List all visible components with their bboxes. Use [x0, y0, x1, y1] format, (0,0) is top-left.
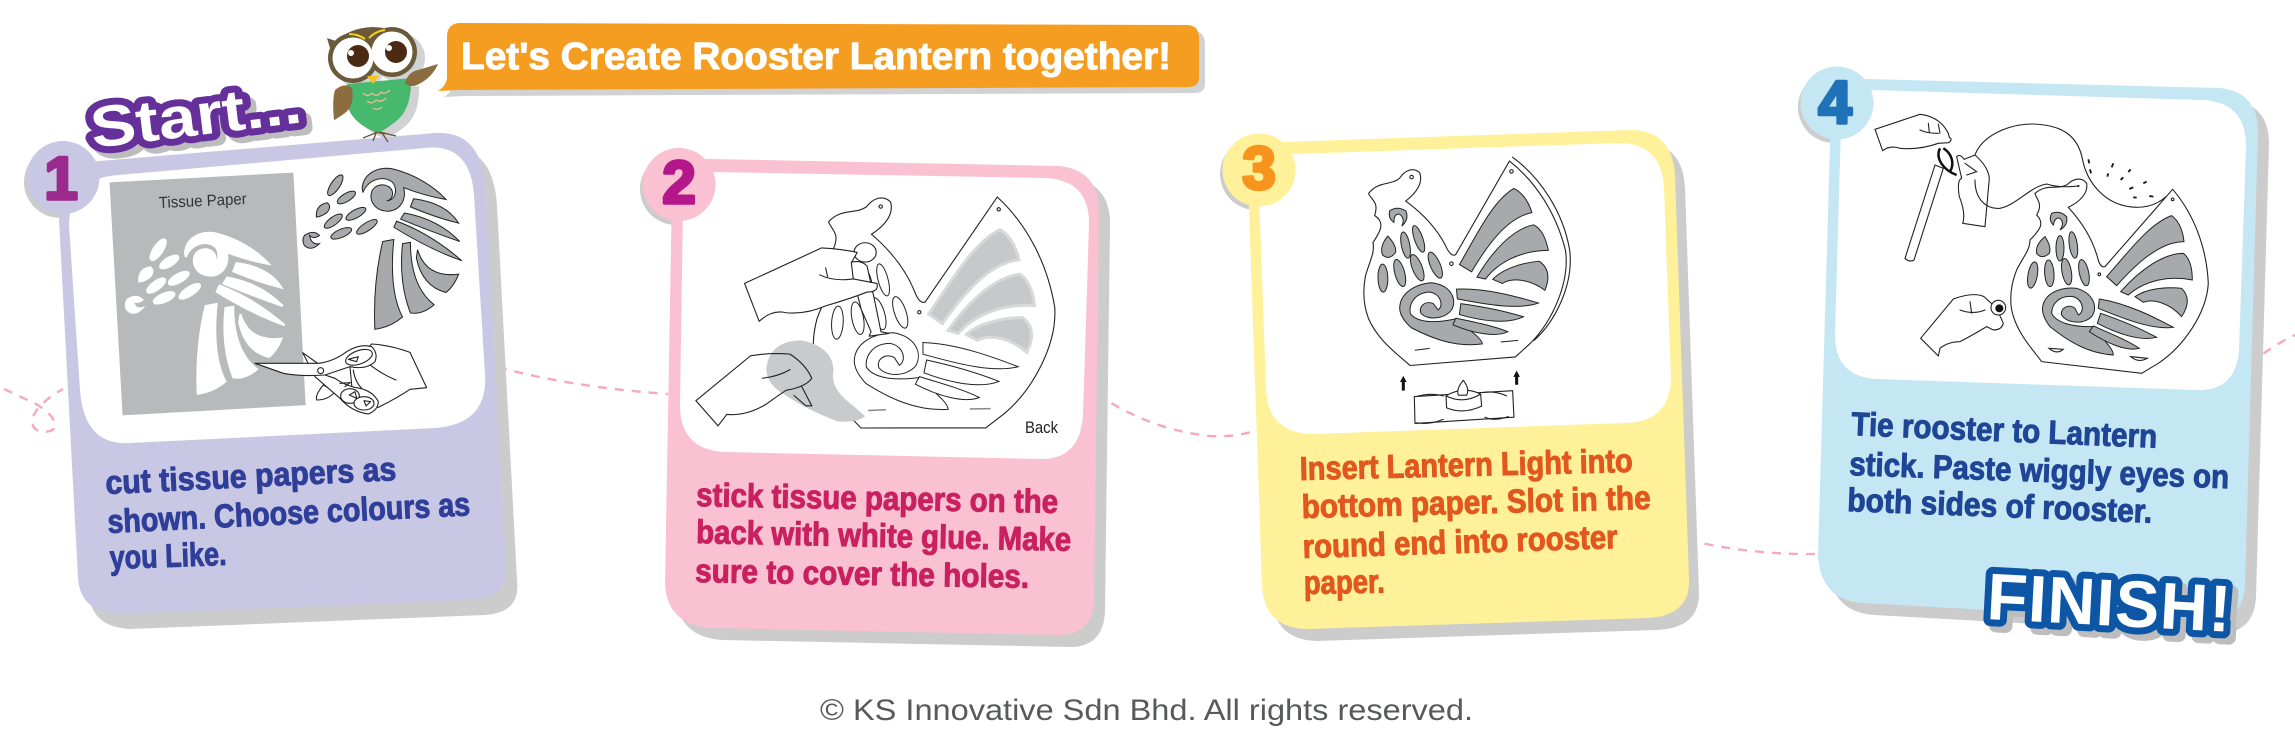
copyright footer: © KS Innovative Sdn Bhd. All rights reserved. [820, 694, 1473, 727]
banner: Let's Create Rooster Lantern together!: Let's Create Rooster Lantern together! [461, 36, 1171, 78]
heading: Start...: Start... [87, 71, 305, 161]
step 3 instruction: paper. [1303, 563, 1385, 601]
label: Back: Back [1025, 418, 1058, 437]
step 2 instruction: sure to cover the holes. [695, 552, 1029, 595]
label: Tissue Paper: Tissue Paper [158, 191, 248, 212]
illustration: tea light with arrows [1400, 371, 1520, 423]
panel: step 4 [1798, 66, 2269, 634]
dashed thread leaving step 4 [2250, 335, 2295, 364]
step 4 instruction [1847, 405, 2230, 530]
step 1 instruction [105, 450, 471, 576]
step 2 number: 2 [662, 149, 696, 216]
step 2 instruction: back with white glue. Make [696, 513, 1072, 558]
decorative dashed thread: left loop [4, 389, 63, 432]
banner: Let's Create Rooster Lantern together! [438, 23, 1205, 97]
step 4 instruction: Tie rooster to Lantern [1851, 405, 2158, 455]
heading: Start...: Start... [92, 76, 311, 166]
step 1 number: 1 [44, 145, 78, 212]
step 3 instruction: round end into rooster [1302, 518, 1618, 565]
illustration: tying rooster to stick and pasting eyes [1875, 114, 2208, 373]
step 3 instruction: Insert Lantern Light into [1299, 442, 1633, 487]
illustration: gluing tissue on back of rooster [696, 179, 1068, 447]
step 3 number: 3 [1242, 135, 1276, 202]
step 1 instruction: cut tissue papers as [105, 450, 397, 501]
dashed thread from step 1 to step 2 [498, 367, 668, 394]
panel: step 1 [24, 133, 517, 629]
step 3 instruction: bottom paper. Slot in the [1301, 479, 1651, 525]
dashed thread from step 3 to step 4 [1688, 540, 1818, 554]
illustration: hand with scissors [255, 344, 427, 414]
heading: FINISH!: FINISH! [1991, 565, 2238, 652]
step 4 number: 4 [1818, 69, 1852, 136]
step 3 instruction [1299, 442, 1651, 601]
panel: step 2 [640, 148, 1110, 647]
illustration: rooster lantern [1341, 142, 1588, 384]
icon: owl mascot [327, 27, 438, 142]
step 4 instruction: both sides of rooster. [1847, 481, 2153, 530]
step 4 instruction: stick. Paste wiggly eyes on [1849, 445, 2230, 495]
heading: FINISH!: FINISH! [1985, 559, 2233, 646]
step 2 instruction [695, 476, 1072, 595]
step 1 instruction: shown. Choose colours as [107, 485, 471, 540]
panel: step 3 [1220, 130, 1699, 641]
dashed thread from step 2 to step 3 [1097, 394, 1251, 436]
step 1 instruction: you Like. [109, 535, 227, 576]
illustration: tissue paper and cut shapes [110, 168, 462, 415]
step 2 instruction: stick tissue papers on the [696, 476, 1059, 520]
